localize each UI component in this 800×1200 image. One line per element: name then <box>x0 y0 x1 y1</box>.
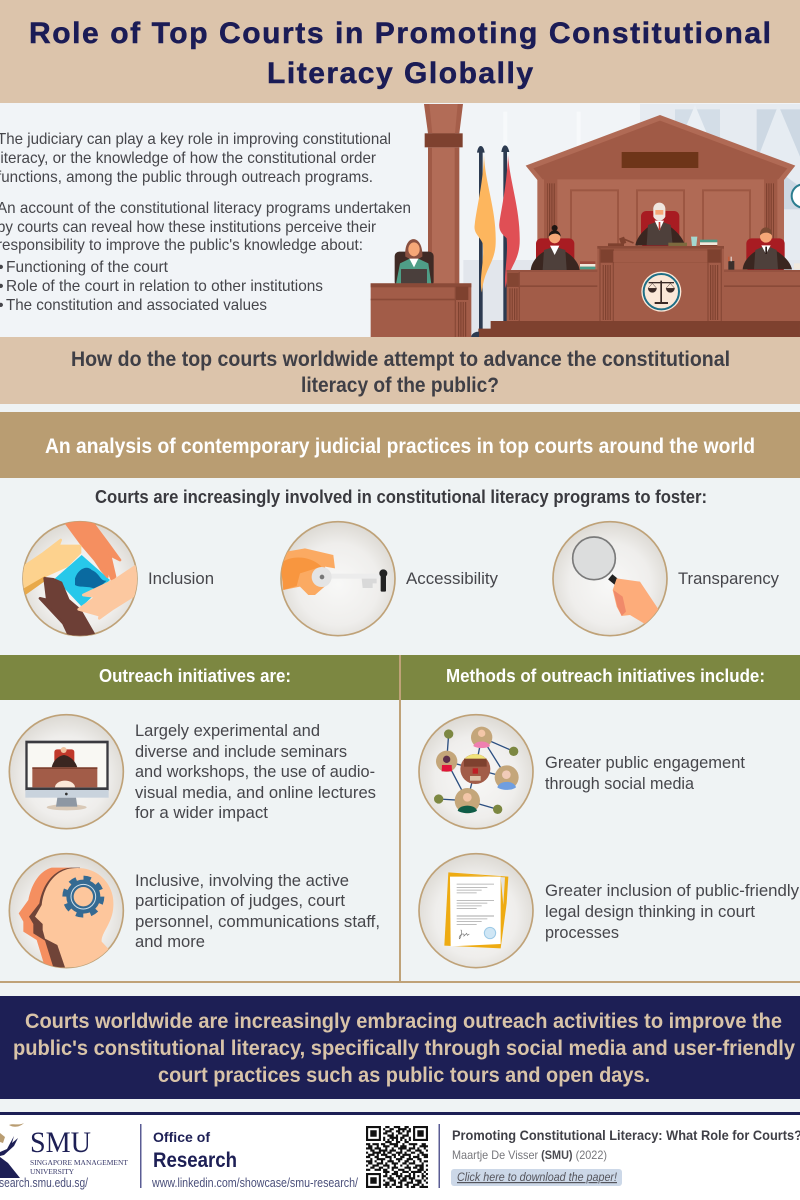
office of research: Office of <box>153 1129 210 1145</box>
logo: SMU: SINGAPORE MANAGEMENT <box>30 1158 128 1167</box>
text: inclusive participation: Inclusive, involving the active <box>135 871 349 890</box>
text: social media: through social media <box>545 774 695 793</box>
intro text: The constitution and associated values <box>6 297 267 314</box>
text: experimental and diverse: diverse and include seminars <box>135 742 347 761</box>
title: Literacy Globally <box>267 57 533 90</box>
text: inclusive participation: and more <box>135 932 205 951</box>
illustration: courtroom <box>371 104 800 337</box>
question banner: literacy of the public? <box>301 374 499 397</box>
icon: magnifying glass <box>553 522 667 636</box>
text: social media: Greater public engagement <box>545 753 745 772</box>
books, gavel and cup <box>580 237 800 270</box>
analysis heading banner <box>0 412 800 478</box>
intro text: literacy, or the knowledge of how the constitutional order <box>0 150 377 167</box>
label: inclusion: Inclusion <box>148 569 214 588</box>
text: experimental and diverse: and workshops, the use of audio- <box>135 762 375 781</box>
icon: heads with gear <box>9 854 123 968</box>
text: inclusive participation <box>135 871 380 951</box>
courthouse building <box>526 115 795 273</box>
intro text: responsibility to improve the public's knowledge about: <box>0 237 363 254</box>
heading: methods of outreach <box>401 655 800 700</box>
text: experimental and diverse: Largely experimental and <box>135 721 320 740</box>
paper author: Maartje De Visser (SMU) (2022) <box>452 1148 607 1162</box>
label: accessibility: Accessibility <box>406 569 498 588</box>
text: legal design: Greater inclusion of public-friendly <box>545 881 799 900</box>
icon: legal documents <box>419 854 533 968</box>
intro text: functions, among the public through outreach programs. <box>0 169 373 186</box>
question banner <box>0 337 800 404</box>
heading: outreach initiatives: Outreach initiatives are: <box>99 666 291 686</box>
emblem: scales of justice <box>641 272 681 312</box>
intro text: Functioning of the court <box>6 259 169 276</box>
download button: Click here to download the paper! <box>457 1170 618 1184</box>
title: Role of Top Courts in Promoting Constitutional <box>29 17 771 50</box>
question banner: How do the top courts worldwide attempt to advance the constitutional <box>71 348 730 371</box>
text: legal design <box>545 881 799 942</box>
title <box>29 17 771 90</box>
conclusion banner: court practices such as public tours and open days. <box>158 1064 650 1087</box>
text: experimental and diverse: for a wider impact <box>135 803 268 822</box>
title banner <box>0 0 800 103</box>
conclusion banner <box>0 996 800 1099</box>
link: linkedin: www.linkedin.com/showcase/smu-research/ <box>151 1176 358 1190</box>
intro text: An account of the constitutional literacy programs undertaken <box>0 200 411 217</box>
logo: SMU: UNIVERSITY <box>30 1167 75 1176</box>
logo: SMU <box>0 1123 128 1178</box>
clerk desk and clerk <box>371 239 471 337</box>
icon: monitor with judge <box>9 715 123 829</box>
text: legal design: processes <box>545 923 619 942</box>
analysis heading banner: An analysis of contemporary judicial practices in top courts around the world <box>45 435 755 458</box>
text: experimental and diverse: visual media, and online lectures <box>135 783 376 802</box>
intro text: Role of the court in relation to other institutions <box>6 278 323 295</box>
conclusion banner: Courts worldwide are increasingly embracing outreach activities to improve the <box>25 1010 782 1033</box>
icon: key in hand <box>281 522 395 636</box>
heading: methods of outreach: Methods of outreach initiatives include: <box>446 666 765 686</box>
QR code <box>366 1127 428 1187</box>
text: inclusive participation: personnel, communications staff, <box>135 912 380 931</box>
goals heading: Courts are increasingly involved in constitutional literacy programs to foster: <box>95 487 707 507</box>
bench <box>507 270 800 323</box>
office of research <box>153 1129 237 1172</box>
text: social media <box>545 753 745 793</box>
intro text: by courts can reveal how these institutions perceive their <box>0 219 377 236</box>
flags <box>474 145 520 333</box>
clock <box>792 184 800 208</box>
label: transparency: Transparency <box>678 569 779 588</box>
panel: hero introduction <box>0 103 800 337</box>
panel: goals of literacy programs <box>23 487 779 636</box>
heading: outreach initiatives <box>0 655 400 700</box>
text: experimental and diverse <box>135 721 376 822</box>
text: legal design: legal design thinking in court <box>545 902 755 921</box>
office of research: Research <box>153 1149 237 1172</box>
icon: inclusion hands and globe <box>23 522 137 636</box>
column <box>424 104 463 133</box>
steps <box>478 321 800 337</box>
judges <box>531 203 792 272</box>
icon: social network <box>419 715 533 829</box>
footer <box>0 1112 800 1200</box>
logo: SMU: SMU <box>30 1126 91 1159</box>
panel: outreach initiatives <box>0 655 400 968</box>
intro text <box>0 131 411 314</box>
text: inclusive participation: participation of judges, court <box>135 891 345 910</box>
panel: methods of outreach <box>401 655 800 968</box>
intro text: The judiciary can play a key role in improving constitutional <box>0 131 391 148</box>
